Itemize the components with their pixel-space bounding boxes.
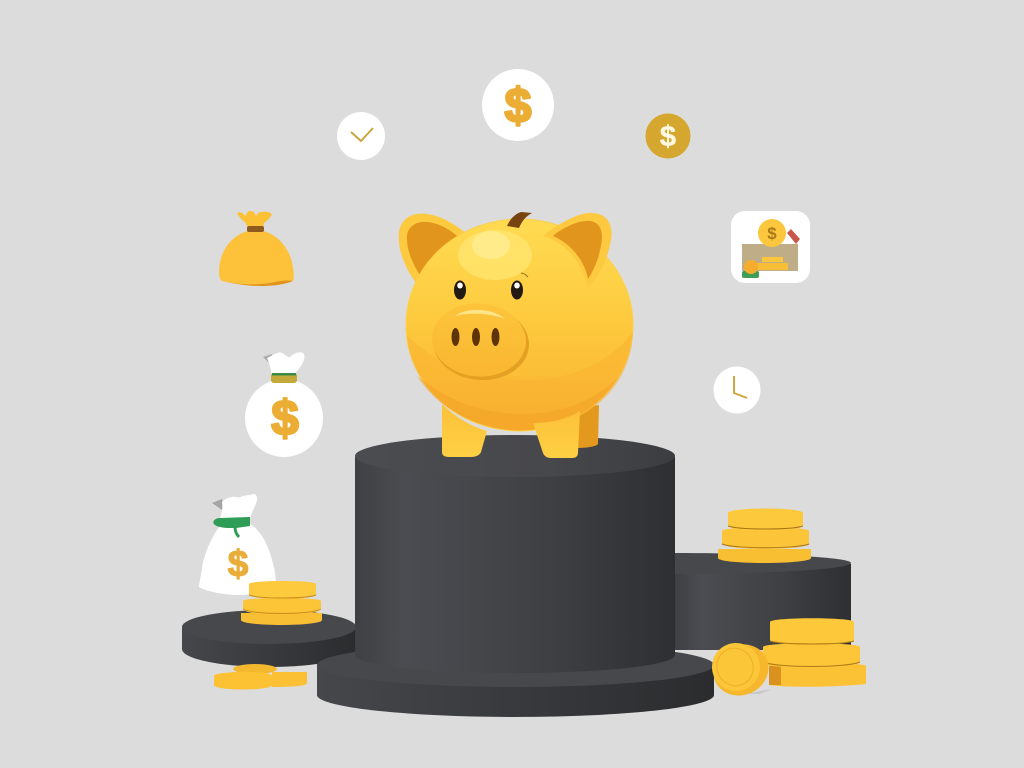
left small podium: [182, 610, 356, 667]
forehead highlight: [458, 230, 532, 280]
left coin stack: [241, 581, 322, 625]
pig body: [406, 219, 633, 431]
bottom left loose coins: [214, 664, 307, 690]
icon: round money bag: $: [271, 392, 299, 446]
eyebrow mark: [521, 273, 528, 277]
icon: large dollar circle: [482, 69, 554, 141]
front right leg: [533, 411, 580, 458]
coin slot: [507, 212, 532, 228]
leaning coin: [704, 635, 777, 704]
main pedestal: [355, 435, 675, 673]
right ear: [543, 213, 612, 289]
right eye: [511, 280, 523, 300]
icon: white money bag with green tie: $: [228, 543, 249, 584]
icon: gold dollar coin: $: [660, 121, 676, 153]
icon: gold money bag: [219, 211, 294, 286]
nostrils: [452, 328, 500, 346]
left eye: [454, 280, 466, 300]
left ear: [399, 214, 467, 287]
icon: white money bag with green tie: [199, 494, 276, 595]
icon: gold dollar coin: [646, 114, 690, 158]
front left leg: [442, 404, 487, 457]
icon: round money bag: [245, 352, 323, 457]
piggy bank: [399, 212, 633, 458]
icon: savings card: [731, 211, 810, 283]
body lower shade: [407, 332, 633, 430]
icon: large dollar circle: $: [505, 80, 532, 133]
icon: check mark circle: [337, 112, 385, 160]
back leg: [578, 405, 599, 448]
right lower coin stack: [763, 618, 866, 687]
icon: savings card: $: [767, 224, 777, 243]
right upper coin stack: [718, 508, 811, 563]
icon: clock circle: [714, 366, 760, 414]
snout: [430, 300, 531, 383]
base pedestal: [317, 643, 714, 717]
right small podium: [675, 553, 851, 650]
